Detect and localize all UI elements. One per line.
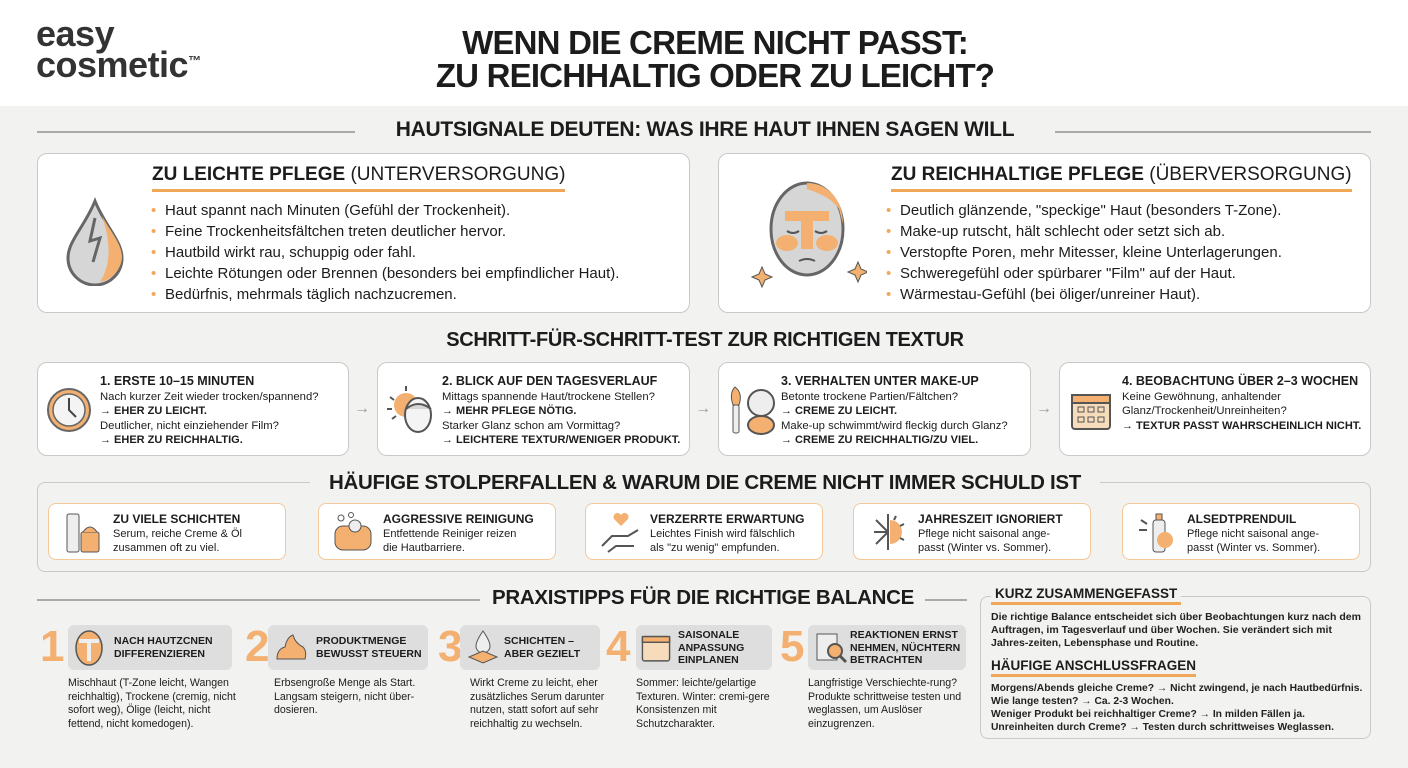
title [436, 24, 994, 94]
pitfall 3: VERZERRTE ERWARTUNG [650, 512, 804, 526]
tip 4: ANPASSUNG [678, 642, 744, 654]
step 2 [377, 362, 690, 456]
step 3 [718, 362, 1031, 456]
panel: zu reichhaltige Pflege [718, 153, 1371, 313]
pitfall 4: JAHRESZEIT IGNORIERT [918, 512, 1063, 526]
panel: Zusammenfassung: Weniger Produkt bei reichhaltiger Creme? → In milden Fällen ja. [991, 709, 1305, 720]
pitfall 3 [585, 503, 823, 560]
step 1: 1. ERSTE 10–15 MINUTEN [100, 374, 254, 388]
heading: ZU REICHHALTIGE PFLEGE (ÜBERVERSORGUNG) [891, 164, 1352, 185]
tip 1: DIFFERENZIEREN [114, 648, 205, 660]
pitfall 4: passt (Winter vs. Sommer). [918, 542, 1051, 554]
icon: brush and compact [730, 386, 775, 435]
panel: zu leichte Pflege [37, 153, 690, 313]
step 4: Keine Gewöhnung, anhaltender [1122, 390, 1281, 402]
tip 2: BEWUSST STEUERN [316, 648, 422, 660]
step 3: → CREME ZU LEICHT. [781, 405, 897, 417]
logo: easy [36, 13, 114, 54]
step 1 [37, 362, 349, 456]
tip 2: Erbsengroße Menge als Start. Langsam steigern, nicht über-dosieren. [274, 677, 415, 716]
panel: Zusammenfassung: Wie lange testen? → Ca. 2-3 Wochen. [991, 696, 1174, 707]
step 4: → TEXTUR PASST WAHRSCHEINLICH NICHT. [1122, 420, 1361, 432]
pitfall 1 [48, 503, 286, 560]
tip 3: Wirkt Creme zu leicht, eher zusätzliches Serum darunter nutzen, statt sofort auf sehr reichhaltig zu wechseln. [470, 677, 604, 730]
tip 3: 3 [438, 622, 462, 671]
icon: clock [47, 388, 91, 432]
heading: ZU LEICHTE PFLEGE (UNTERVERSORGUNG) [152, 164, 565, 185]
icon: bottle [1139, 514, 1173, 552]
pitfall 2: AGGRESSIVE REINIGUNG [383, 512, 534, 526]
tip 4: 4 [606, 622, 630, 671]
tip 2: 2 [245, 622, 269, 671]
step 2: → LEICHTERE TEXTUR/WENIGER PRODUKT. [442, 434, 680, 446]
tip 4 [606, 622, 772, 730]
step 1: Nach kurzer Zeit wieder trocken/spannend? [100, 390, 319, 402]
step 4: Glanz/Trockenheit/Unreinheiten? [1122, 405, 1287, 417]
step 2: 2. BLICK AUF DEN TAGESVERLAUF [442, 374, 657, 388]
icon: magnifier [816, 634, 847, 663]
step 4: 4. BEOBACHTUNG ÜBER 2–3 WOCHEN [1122, 374, 1358, 388]
tip 5: Langfristige Verschiechte-rung? Produkte schrittweise testen und weglassen, um Auslöser einzugrenzen. [808, 677, 961, 730]
pitfall 4 [853, 503, 1091, 560]
title: ZU REICHHALTIG ODER ZU LEICHT? [436, 57, 994, 94]
tip 5: 5 [780, 622, 804, 671]
heading: Schritt-für-Schritt: SCHRITT-FÜR-SCHRITT-TEST ZUR RICHTIGEN TEXTUR [446, 329, 964, 351]
bullet list: Deutlich glänzende, "speckige" Haut (besonders T-Zone). [900, 202, 1281, 219]
icon: sun face [387, 386, 432, 433]
tip 4: EINPLANEN [678, 654, 739, 666]
icon: sun snowflake [874, 514, 904, 550]
bullet list [152, 202, 619, 303]
icon: oily face [750, 182, 867, 288]
heading: Hautsignale: HAUTSIGNALE DEUTEN: WAS IHRE HAUT IHNEN SAGEN WILL [396, 118, 1014, 141]
heading: Praxistipps: PRAXISTIPPS FÜR DIE RICHTIGE BALANCE [492, 586, 914, 609]
pitfall 5: Pflege nicht saisonal ange- [1187, 528, 1319, 540]
step 3: → CREME ZU REICHHALTIG/ZU VIEL. [781, 434, 978, 446]
bullet list: Verstopfte Poren, mehr Mitesser, kleine Unterlagerungen. [900, 244, 1282, 261]
icon: cracked drop [66, 197, 124, 286]
tip 3: ABER GEZIELT [504, 648, 580, 660]
step 2: Mittags spannende Haut/trockene Stellen? [442, 390, 655, 402]
tip 1 [40, 622, 236, 730]
pitfall 1: Serum, reiche Creme & Öl [113, 528, 242, 540]
icon: sponge [334, 512, 372, 550]
panel: Zusammenfassung: Morgens/Abends gleiche Creme? → Nicht zwingend, je nach Hautbedürfnis. [991, 683, 1362, 694]
heading: Stolperfallen: HÄUFIGE STOLPERFALLEN & WARUM DIE CREME NICHT IMMER SCHULD IST [329, 471, 1081, 494]
icon: calendar [1071, 394, 1111, 430]
panel: Zusammenfassung: Unreinheiten durch Creme? → Testen durch schrittweises Weglassen. [991, 722, 1334, 733]
pitfall 2 [318, 503, 556, 560]
step 4 [1059, 362, 1371, 456]
tip 4: Sommer: leichte/gelartige Texturen. Winter: cremi-gere Konsistenzen mit Schutzcharakter. [636, 677, 770, 730]
tip 5: BETRACHTEN [850, 654, 922, 666]
bullet list: Wärmestau-Gefühl (bei öliger/unreiner Haut). [900, 286, 1200, 303]
bullet list: Make-up rutscht, hält schlecht oder setzt sich ab. [900, 223, 1225, 240]
bullet list: Leichte Rötungen oder Brennen (besonders bei empfindlicher Haut). [165, 265, 619, 282]
arrow: → [695, 400, 711, 417]
step 2: → MEHR PFLEGE NÖTIG. [442, 405, 576, 417]
bullet list: Hautbild wirkt rau, schuppig oder fahl. [165, 244, 416, 261]
step 3: 3. VERHALTEN UNTER MAKE-UP [781, 374, 979, 388]
icon: cream dollop [276, 634, 306, 660]
logo: cosmetic™ [36, 44, 201, 85]
pitfall 4: Pflege nicht saisonal ange- [918, 528, 1050, 540]
icon: calendar [642, 636, 670, 662]
icon: hand with heart [601, 513, 638, 553]
pitfall 3: Leichtes Finish wird fälschlich [650, 528, 795, 540]
icon: drop layers [468, 630, 498, 664]
tip 1: Mischhaut (T-Zone leicht, Wangen reichhaltig), Trockene (cremig, nicht sofort weg), Ölige (leicht, nicht fettend, nicht komedogen). [68, 677, 236, 730]
tip 5 [780, 622, 966, 730]
bullet list: Schweregefühl oder spürbarer "Film" auf der Haut. [900, 265, 1236, 282]
pitfall 1: ZU VIELE SCHICHTEN [113, 512, 240, 526]
tip 5: NEHMEN, NÜCHTERN [850, 642, 960, 654]
icon: face zones [75, 630, 103, 666]
step 1: Deutlicher, nicht einziehender Film? [100, 420, 279, 432]
tip 3 [438, 622, 604, 730]
title: WENN DIE CREME NICHT PASST: [462, 24, 968, 61]
logo [36, 13, 201, 85]
bullet list [886, 202, 1282, 303]
pitfall 2: die Hautbarriere. [383, 542, 465, 554]
tip 2: PRODUKTMENGE [316, 635, 406, 647]
pitfall 2: Entfettende Reiniger reizen [383, 528, 516, 540]
step 1: → EHER ZU LEICHT. [100, 405, 207, 417]
tip 2 [245, 622, 428, 716]
panel: Stolperfallen [37, 482, 1371, 572]
tip 1: NACH HAUTZCNEN [114, 635, 213, 647]
step 3: Betonte trockene Partien/Fältchen? [781, 390, 958, 402]
tip 3: SCHICHTEN – [504, 635, 574, 647]
pitfall 5: passt (Winter vs. Sommer). [1187, 542, 1320, 554]
heading: Kurz zusammengefasst: KURZ ZUSAMMENGEFASST [995, 586, 1177, 601]
bullet list: Bedürfnis, mehrmals täglich nachzucremen. [165, 286, 457, 303]
arrow: → [1036, 400, 1052, 417]
step 2: Starker Glanz schon am Vormittag? [442, 420, 620, 432]
panel: Zusammenfassung: Die richtige Balance entscheidet sich über Beobachtungen kurz nach dem Auftragen, im Tagesverlauf und über Wochen. Sie verändert sich mit Jahres-zeiten, Lebensphase und Routine. [991, 611, 1361, 649]
arrow: → [354, 400, 370, 417]
bullet list: Haut spannt nach Minuten (Gefühl der Trockenheit). [165, 202, 510, 219]
heading: Anschlussfragen: HÄUFIGE ANSCHLUSSFRAGEN [991, 658, 1196, 673]
pitfall 5: ALSEDTPRENDUIL [1187, 512, 1296, 526]
pitfall 1: zusammen oft zu viel. [113, 542, 219, 554]
tip 1: 1 [40, 622, 64, 671]
header background [0, 0, 1408, 106]
tip 5: REAKTIONEN ERNST [850, 629, 958, 641]
bullet list: Feine Trockenheitsfältchen treten deutlicher hervor. [165, 223, 506, 240]
pitfall 3: als "zu wenig" empfunden. [650, 542, 780, 554]
pitfall 5 [1122, 503, 1360, 560]
panel: Zusammenfassung [980, 596, 1371, 739]
step 1: → EHER ZU REICHHALTIG. [100, 434, 243, 446]
icon: tubes [66, 514, 100, 552]
tip 4: SAISONALE [678, 629, 739, 641]
step 3: Make-up schwimmt/wird fleckig durch Glanz? [781, 420, 1008, 432]
